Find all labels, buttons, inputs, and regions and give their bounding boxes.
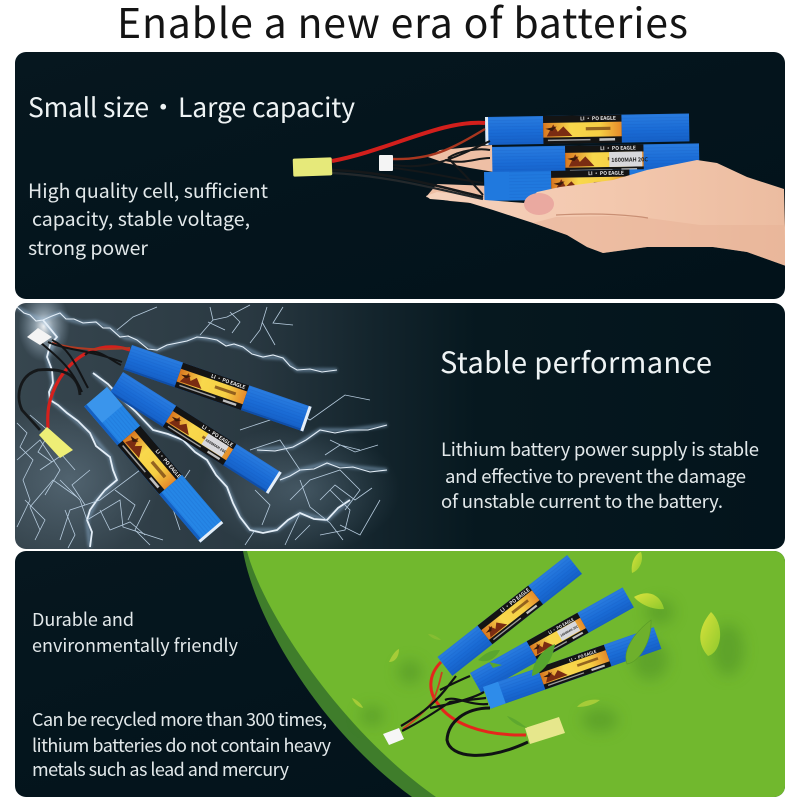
leaf shadows xyxy=(360,600,744,732)
text block: durable: Durable and xyxy=(32,606,134,632)
panel: small size, large capacity xyxy=(15,52,786,299)
heading: small size large capacity: Large capacity xyxy=(178,86,355,125)
battery: bottom: LI · PO EAGLE xyxy=(568,649,598,664)
heading: small size large capacity: · xyxy=(150,86,176,125)
text block: stability description: of unstable current to the battery. xyxy=(441,488,723,514)
lightning background xyxy=(15,303,389,549)
tamiya connector xyxy=(293,157,332,177)
battery: back: LI · PO EAGLE xyxy=(210,373,246,391)
thumb nail xyxy=(524,193,554,215)
thumb crease xyxy=(556,214,648,218)
panel: durable and eco friendly xyxy=(15,551,785,797)
battery: front xyxy=(84,387,223,543)
heading: stable performance: Stable performance xyxy=(440,340,712,382)
balance connector xyxy=(27,328,52,345)
balance connector xyxy=(379,155,393,171)
text block: quality description xyxy=(28,182,268,260)
text block: quality description: High quality cell, sufficient xyxy=(28,175,269,204)
text block: durable: environmentally friendly xyxy=(32,632,239,658)
hand: palm and thumb xyxy=(426,160,786,266)
text block: quality description: strong power xyxy=(28,232,148,261)
battery: middle xyxy=(470,587,634,693)
panel: stable performance xyxy=(15,303,785,549)
battery: middle of stack: LI · PO EAGLE xyxy=(600,144,636,152)
hand: back fingers xyxy=(426,145,494,205)
battery: top of stack xyxy=(485,113,689,145)
text block: durable xyxy=(32,612,238,656)
green curved background edge xyxy=(243,551,785,797)
battery: top xyxy=(438,555,582,676)
heading: small size large capacity xyxy=(29,96,355,124)
battery: middle: 1600MAH 20C xyxy=(559,624,579,638)
text block: recycling description: metals such as lead and mercury xyxy=(32,756,290,782)
battery: middle of stack: 1600MAH 20C xyxy=(611,155,648,164)
battery: middle: 1600MAH 20C xyxy=(204,438,227,456)
text block: recycling description: lithium batteries do not contain heavy xyxy=(32,732,332,758)
battery: middle xyxy=(110,372,282,494)
text block: stability description xyxy=(441,436,759,514)
battery: front: LI · PO EAGLE xyxy=(154,448,182,480)
text block: recycling description xyxy=(33,712,331,780)
battery: top of stack: LI · PO EAGLE xyxy=(580,115,616,122)
green curved background xyxy=(247,551,785,797)
tamiya connector xyxy=(39,427,73,458)
wires and connectors xyxy=(19,340,130,430)
text block: stability description: Lithium battery power supply is stable xyxy=(441,436,759,462)
wires and connectors xyxy=(332,123,490,199)
battery: middle: LI · PO EAGLE xyxy=(200,423,234,449)
text block: recycling description: Can be recycled more than 300 times, xyxy=(32,706,327,732)
text block: stability description: and effective to prevent the damage xyxy=(445,463,746,489)
wires and connectors xyxy=(401,662,528,755)
balance connector xyxy=(383,728,404,745)
battery: back xyxy=(124,345,312,431)
battery: top: LI · PO EAGLE xyxy=(499,587,531,614)
battery: bottom of stack xyxy=(484,169,650,201)
battery: middle of stack xyxy=(492,143,700,172)
battery: bottom xyxy=(483,627,661,709)
text block: quality description: capacity, stable voltage, xyxy=(32,203,250,232)
leaves xyxy=(352,552,720,728)
tamiya connector xyxy=(525,717,565,744)
battery: middle: LI · PO EAGLE xyxy=(547,616,576,636)
heading: small size large capacity: Small size xyxy=(28,86,149,125)
battery: bottom of stack: LI · PO EAGLE xyxy=(588,170,624,177)
